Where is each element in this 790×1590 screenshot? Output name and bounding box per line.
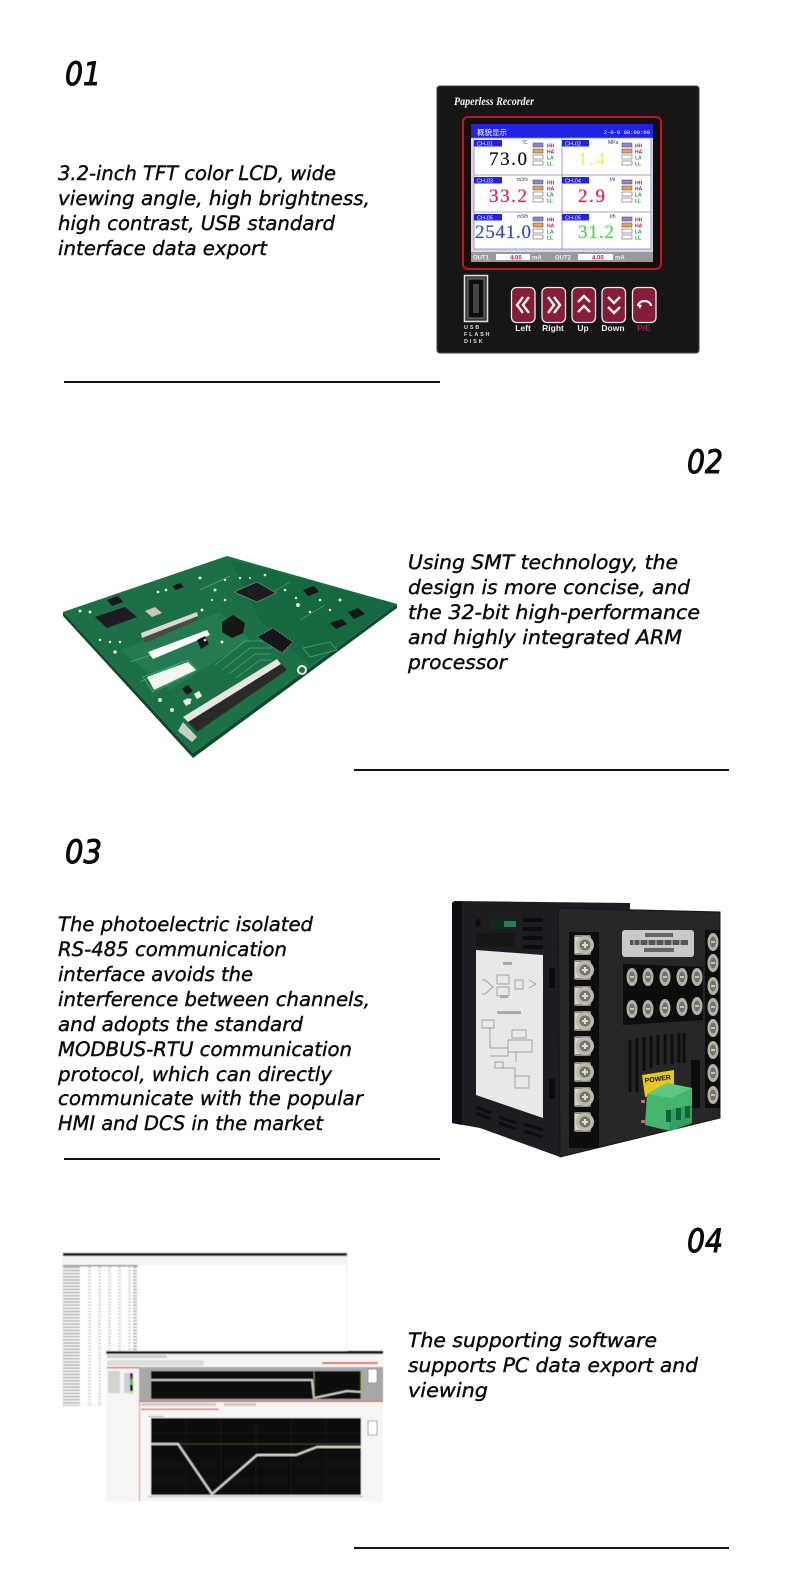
chart window title bar xyxy=(106,1351,383,1354)
section 03 text block: The photoelectric isolated xyxy=(58,913,314,936)
channel CH-05: CH-05 xyxy=(477,216,493,222)
button: Down: Down xyxy=(601,323,625,333)
LCD screen xyxy=(471,124,653,262)
channel CH-04: LL xyxy=(635,198,641,204)
channel CH-01: °C xyxy=(522,140,528,146)
section 02 number: 02 xyxy=(687,443,723,481)
image: PC software screenshots xyxy=(63,1253,383,1501)
button: Left: Left xyxy=(515,323,531,333)
power warning sticker xyxy=(642,1070,674,1097)
ribbon connector small xyxy=(141,612,198,643)
left side housing xyxy=(452,901,720,1157)
lighter board areas xyxy=(120,612,250,690)
right terminal block xyxy=(705,930,720,1108)
section 03 text block: communicate with the popular xyxy=(58,1087,365,1110)
channel CH-06: CH-05 xyxy=(565,216,581,222)
channel CH-05: 2541.0 xyxy=(475,222,531,243)
channel CH-01: LL xyxy=(547,162,553,168)
chip 2 xyxy=(234,582,276,602)
crystal xyxy=(145,607,162,617)
barcode label xyxy=(622,930,694,957)
ribbon connector large xyxy=(178,659,287,742)
section 01 text block: high contrast, USB standard xyxy=(58,212,336,235)
channel CH-01: HA xyxy=(547,150,555,156)
vent and slot at top xyxy=(476,919,543,947)
slot cut-outs xyxy=(148,630,210,659)
LCD channel grid xyxy=(474,138,651,249)
output status bar: mA xyxy=(615,256,625,262)
section 04 text block xyxy=(408,1329,699,1402)
channel CH-04: 2.9 xyxy=(578,186,605,207)
section 03 number: 03 xyxy=(65,833,102,871)
channel CH-02: 1.4 xyxy=(578,149,606,170)
channel CH-04: LA xyxy=(635,192,642,198)
channel CH-06: LA xyxy=(635,230,642,236)
wiring diagram sticker xyxy=(476,950,543,1118)
USB flash disk label: FLASH xyxy=(464,332,491,338)
image: green circuit board xyxy=(63,556,397,758)
USB flash disk label xyxy=(464,325,491,345)
section 01 number: 01 xyxy=(65,55,101,93)
channel CH-02: CH-02 xyxy=(565,142,581,148)
button: P/E xyxy=(632,288,656,333)
output status bar: OUT1 xyxy=(473,256,490,262)
channel CH-03: 33.2 xyxy=(489,186,527,207)
image: paperless recorder front panel xyxy=(437,86,699,353)
button: Right: Right xyxy=(542,323,564,333)
chip 1 xyxy=(95,607,137,628)
channel CH-05: m3/h xyxy=(517,214,528,220)
output status bar: OUT2 xyxy=(555,256,572,262)
channel CH-04: t/s xyxy=(610,177,616,183)
button: Up: Up xyxy=(577,323,589,333)
section 02 text block: design is more concise, and xyxy=(408,576,691,599)
channel CH-03 xyxy=(474,177,555,207)
section 03 text block: and adopts the standard xyxy=(58,1013,304,1036)
channel CH-06: 31.2 xyxy=(578,222,614,243)
section 02 text block: processor xyxy=(407,651,509,674)
section 02 text block: and highly integrated ARM xyxy=(408,626,682,649)
channel CH-05 xyxy=(474,214,555,243)
section 02 text block: the 32-bit high-performance xyxy=(408,601,700,624)
output status bar: 4.00 xyxy=(592,256,604,262)
chart window xyxy=(106,1351,383,1501)
section 04 text block: supports PC data export and xyxy=(408,1354,699,1377)
channel CH-04 xyxy=(562,177,643,207)
channel CH-03: HH xyxy=(547,180,555,186)
red frame around main chart xyxy=(139,1402,140,1501)
button: Right xyxy=(542,288,566,333)
main trend chart xyxy=(148,1416,377,1497)
channel CH-03: HA xyxy=(547,186,555,192)
section 03 text block xyxy=(57,913,370,1135)
button: Down xyxy=(601,288,626,333)
channel CH-02 xyxy=(562,140,643,170)
section 03 text block: RS-485 communication xyxy=(58,938,287,961)
channel CH-02: LA xyxy=(635,156,642,162)
channel CH-05: LL xyxy=(547,236,553,242)
channel CH-06 xyxy=(562,214,643,243)
divider line 2 xyxy=(354,769,729,771)
channel CH-03: CH-03 xyxy=(477,178,493,184)
USB port xyxy=(464,276,488,322)
table window title bar xyxy=(63,1253,347,1256)
channel CH-04: HA xyxy=(635,186,643,192)
mounting hole xyxy=(298,666,306,674)
board side edge xyxy=(63,604,397,758)
channel CH-06: HA xyxy=(635,224,643,230)
chip 3 xyxy=(257,628,293,653)
LCD title bar: 2-0-0 00:00:00 xyxy=(604,129,650,136)
output status bar: 4.00 xyxy=(510,256,522,262)
rear face xyxy=(558,908,720,1157)
section 02 text block xyxy=(407,551,700,674)
divider line 1 xyxy=(64,381,440,383)
channel CH-03: LL xyxy=(547,198,553,204)
USB flash disk label: DISK xyxy=(464,339,484,345)
divider line 3 xyxy=(64,1158,440,1160)
channel CH-02: MPa xyxy=(608,140,618,146)
side clips xyxy=(549,968,555,1099)
USB flash disk label: USB xyxy=(464,325,481,331)
data table rows xyxy=(63,1266,137,1406)
channel CH-01: LA xyxy=(547,156,554,162)
section 04 number: 04 xyxy=(687,1222,723,1260)
section 04 text block: The supporting software xyxy=(408,1329,657,1352)
chart controls xyxy=(141,1403,256,1410)
channel CH-01: 73.0 xyxy=(489,149,527,170)
section 03 text block: protocol, which can directly xyxy=(57,1063,332,1086)
channel CH-03: LA xyxy=(547,192,554,198)
white pads xyxy=(183,691,202,706)
device body xyxy=(437,86,699,353)
red screen frame xyxy=(463,117,661,269)
button: Up xyxy=(572,288,596,333)
channel CH-01: CH-01 xyxy=(477,142,493,148)
solder speckles xyxy=(78,574,342,712)
bottom side vents xyxy=(476,1107,543,1137)
section 01 text block xyxy=(58,162,370,260)
channel CH-06: t/h xyxy=(610,214,616,220)
section 03 text block: HMI and DCS in the market xyxy=(58,1112,324,1135)
channel CH-05: LA xyxy=(547,230,554,236)
channel CH-02: LL xyxy=(635,162,641,168)
LCD title bar xyxy=(471,124,653,138)
channel CH-01: HH xyxy=(547,144,555,150)
button: Left xyxy=(512,288,535,333)
small components xyxy=(107,583,365,695)
channel CH-02: HH xyxy=(635,144,643,150)
section 02 text block: Using SMT technology, the xyxy=(408,551,678,574)
toolbar xyxy=(107,1355,378,1368)
channel CH-01 xyxy=(474,140,555,170)
board surface xyxy=(63,556,397,753)
channel legend xyxy=(108,1371,133,1394)
section 03 text block: interface avoids the xyxy=(58,963,253,986)
channel CH-06: HH xyxy=(635,218,643,224)
output status bar xyxy=(471,252,653,262)
section 04 text block: viewing xyxy=(408,1379,488,1402)
data table window xyxy=(63,1253,347,1406)
inductor xyxy=(222,615,245,638)
section 01 text block: viewing angle, high brightness, xyxy=(58,187,370,210)
divider line 4 xyxy=(354,1547,729,1549)
channel CH-02: HA xyxy=(635,150,643,156)
section 03 text block: interference between channels, xyxy=(58,988,370,1011)
front bezel strip xyxy=(452,901,462,1125)
left terminal block xyxy=(569,932,599,1148)
rear vents xyxy=(630,1033,700,1108)
section 01 text block: 3.2-inch TFT color LCD, wide xyxy=(58,162,336,185)
green power connector xyxy=(641,1083,692,1131)
section 03 text block: MODBUS-RTU communication xyxy=(58,1038,352,1061)
brand title: Paperless Recorder xyxy=(454,96,534,108)
LCD title bar: 概貌显示 xyxy=(477,127,507,137)
button: P/E: P/E xyxy=(637,323,651,333)
middle terminal block xyxy=(623,964,703,1025)
channel CH-04: HH xyxy=(635,180,643,186)
circuit traces xyxy=(130,576,337,692)
overview chart xyxy=(139,1367,383,1402)
channel CH-03: m3/s xyxy=(517,177,528,183)
power warning sticker: POWER xyxy=(644,1074,671,1085)
image: recorder rear terminals xyxy=(452,901,720,1157)
channel CH-06: LL xyxy=(635,236,641,242)
output status bar: mA xyxy=(532,256,542,262)
section 01 text block: interface data export xyxy=(58,237,268,260)
channel CH-05: HA xyxy=(547,224,555,230)
channel CH-04: CH-04 xyxy=(565,178,581,184)
channel CH-05: HH xyxy=(547,218,555,224)
